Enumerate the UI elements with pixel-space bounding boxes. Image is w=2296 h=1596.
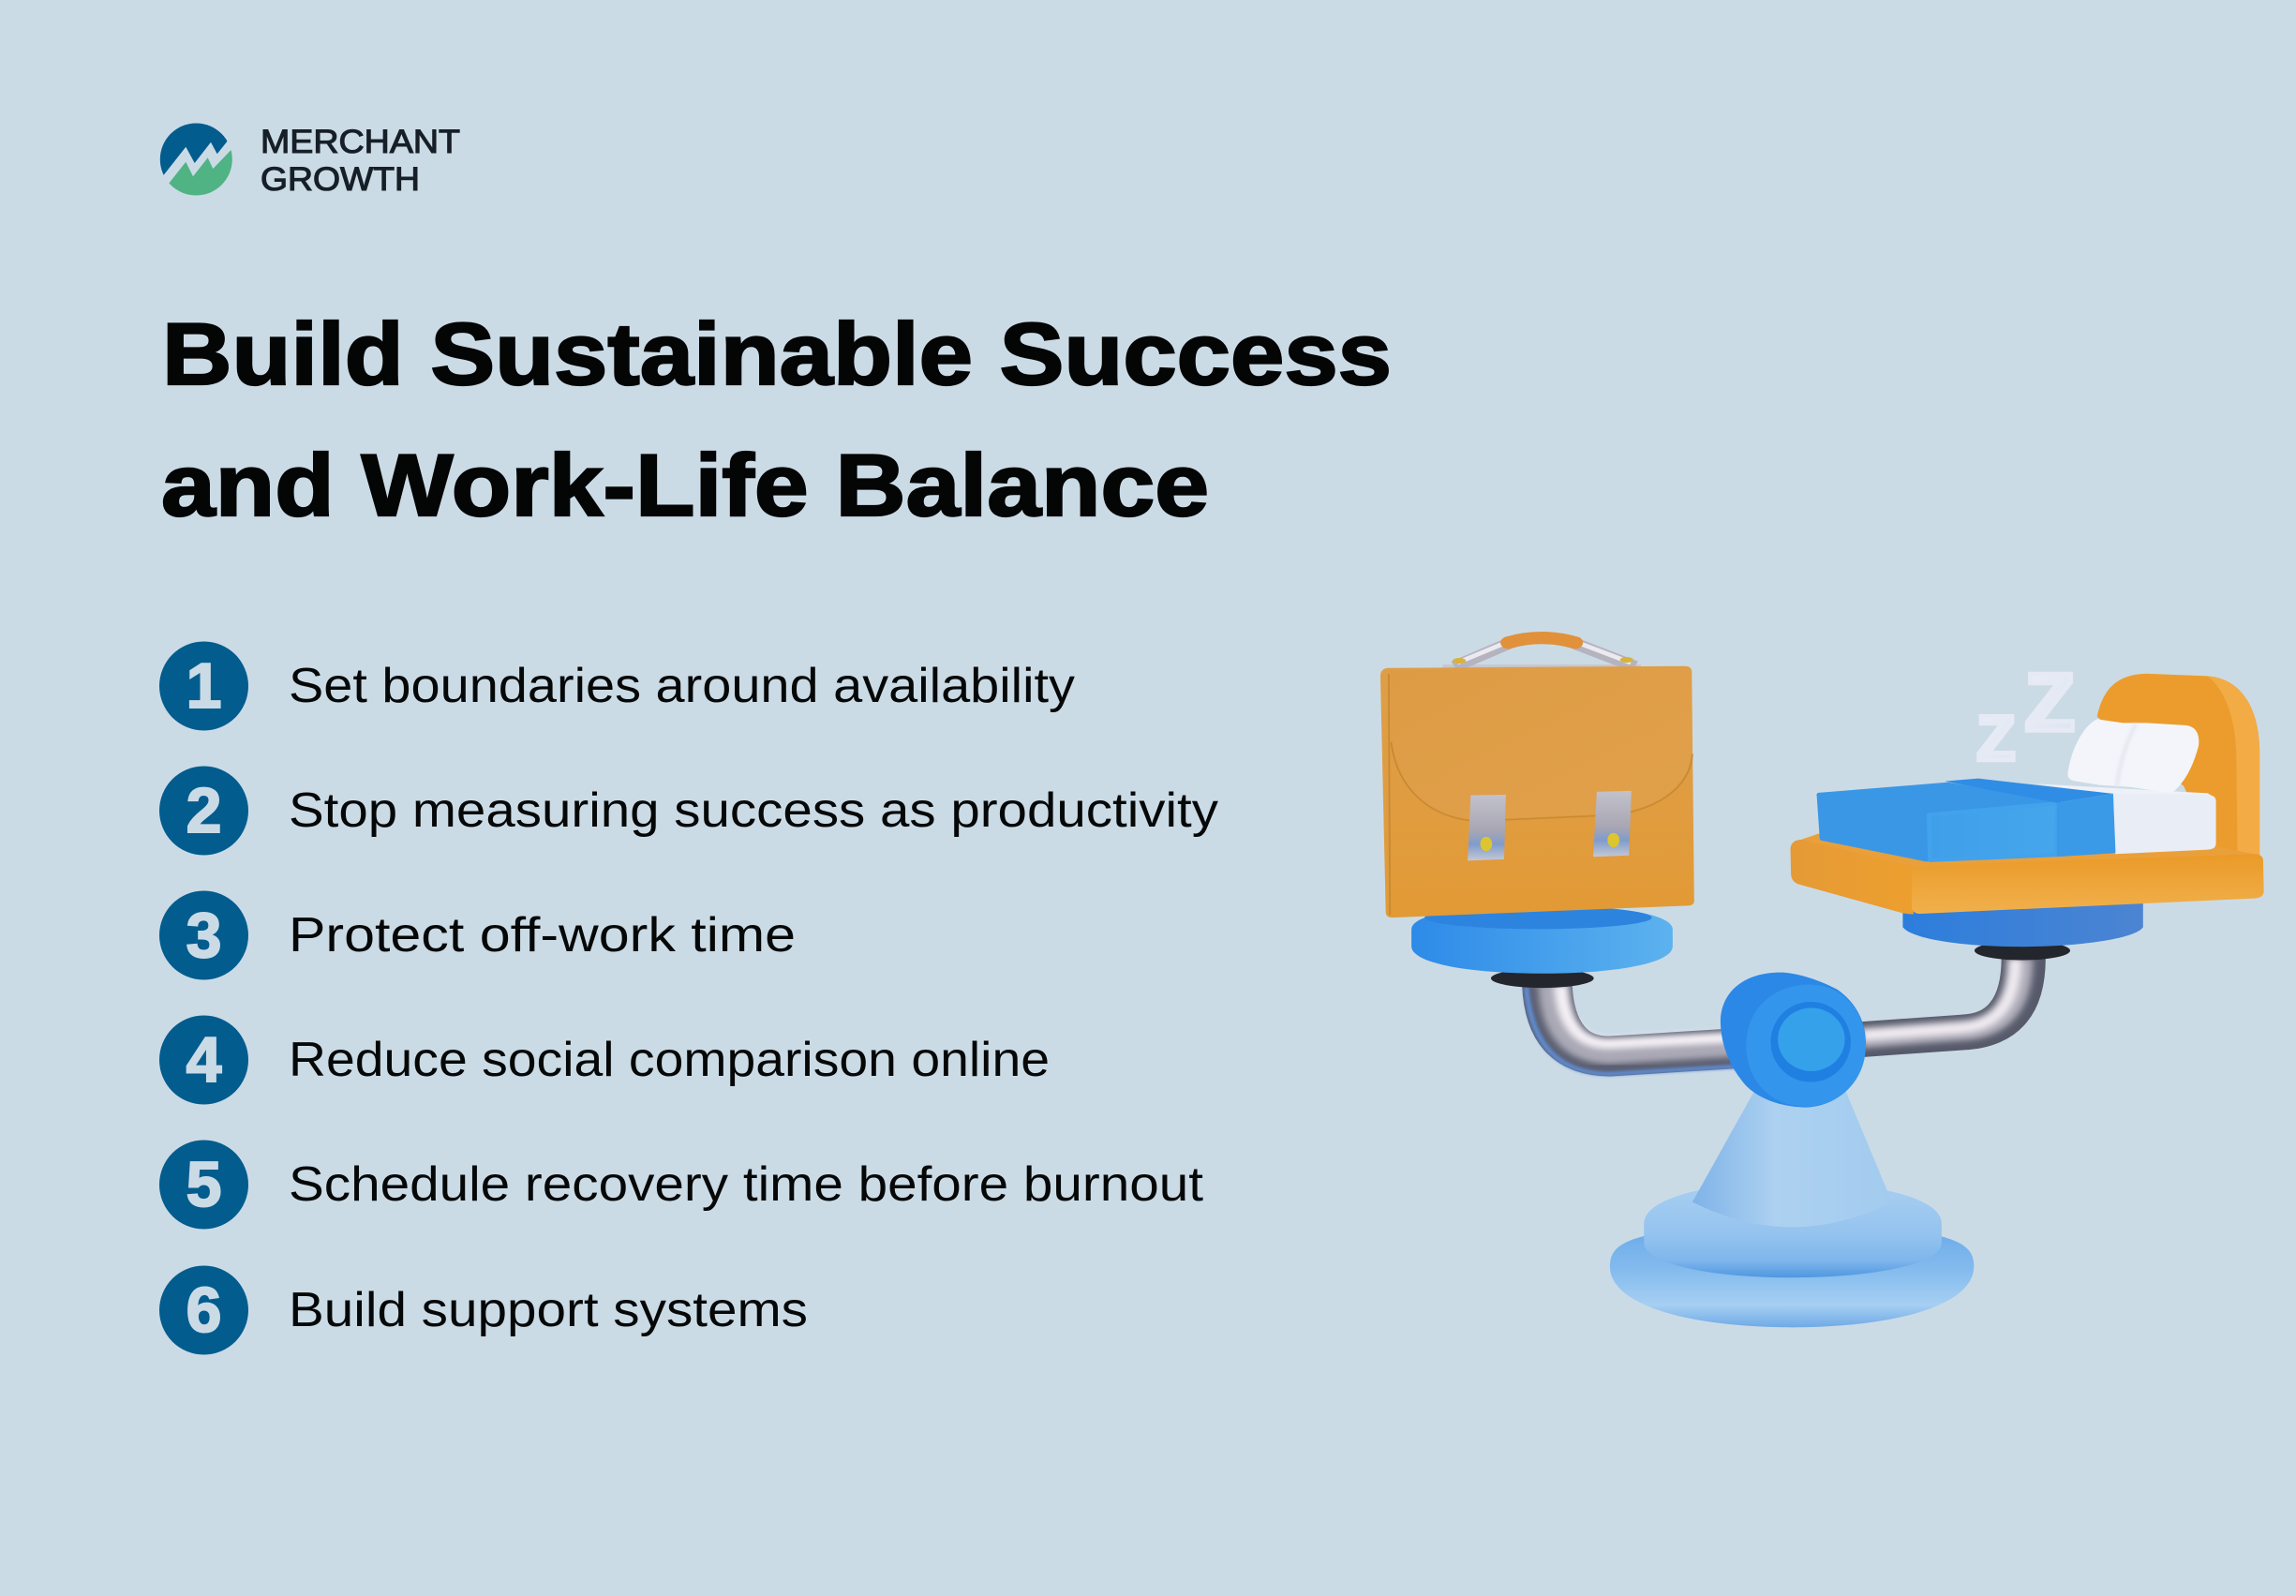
list of six tips (159, 641, 1218, 1355)
item 2: Stop measuring success as productivity (289, 783, 1218, 838)
item 1 (159, 641, 1075, 731)
item 6 (159, 1265, 808, 1355)
logo wordmark (261, 124, 460, 198)
title: Build Sustainable Success (162, 305, 1392, 403)
scale left arm (1527, 985, 1748, 1074)
bed (1790, 657, 2264, 915)
zzz letters: Z (2025, 657, 2075, 749)
right pan connector (1975, 941, 2070, 960)
scale right arm (1861, 958, 2023, 1039)
item 4: 4 (186, 1024, 222, 1096)
scale cone (1692, 1087, 1892, 1227)
title: and Work-Life Balance (161, 436, 1209, 534)
briefcase right strap (1593, 791, 1632, 857)
pivot hub (1721, 973, 1866, 1108)
scale base (1610, 1182, 1974, 1327)
briefcase (1380, 638, 1694, 917)
logo: Merchant Growth (159, 124, 460, 195)
item 3: 3 (186, 900, 221, 971)
bed headboard (2097, 674, 2259, 856)
item 6: Build support systems (289, 1283, 808, 1337)
bed frame (1790, 832, 2264, 915)
zzz letters: Z (1976, 704, 2015, 774)
item 3: Protect off-work time (289, 908, 796, 962)
item 6: 6 (186, 1275, 221, 1346)
right pan (1902, 903, 2143, 947)
briefcase handle (1442, 638, 1641, 667)
item 4: Reduce social comparison online (289, 1033, 1050, 1087)
logo mark (159, 124, 232, 195)
item 1: 1 (186, 650, 221, 722)
item 5: 5 (186, 1149, 221, 1220)
briefcase left strap (1468, 795, 1506, 860)
logo wordmark: MERCHANT (261, 124, 460, 160)
item 3 (159, 890, 796, 980)
left pan connector (1491, 969, 1594, 988)
item 1: Set boundaries around availability (289, 659, 1075, 713)
item 5: Schedule recovery time before burnout (289, 1157, 1204, 1212)
left pan (1411, 905, 1673, 974)
item 5 (159, 1140, 1204, 1230)
item 4 (159, 1016, 1050, 1104)
bed sheet (2035, 783, 2216, 854)
title (161, 305, 1392, 534)
briefcase flap (1390, 668, 1692, 819)
zzz letters (1976, 657, 2075, 774)
briefcase body (1380, 666, 1694, 917)
illustration: balance scale with briefcase and bed (1380, 638, 2264, 1327)
logo wordmark: GROWTH (261, 161, 420, 198)
item 2: 2 (186, 775, 221, 846)
bed pillow (2067, 719, 2199, 793)
item 2 (159, 767, 1218, 855)
bed blanket (1819, 779, 2115, 860)
